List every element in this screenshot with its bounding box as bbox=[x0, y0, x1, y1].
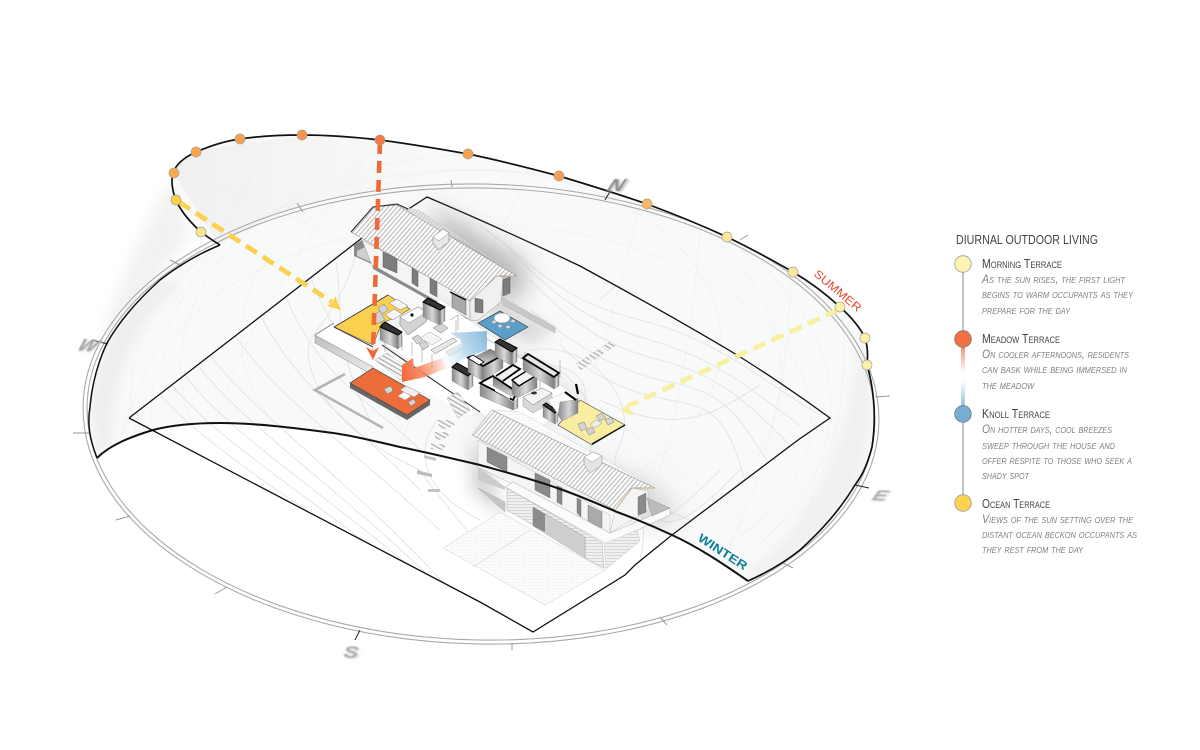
room H bbox=[543, 403, 558, 424]
north house chimney bbox=[433, 229, 449, 250]
legend item: ocean terrace: Ocean Terrace bbox=[982, 497, 1050, 511]
low wall bbox=[503, 298, 555, 333]
legend item: knoll terrace: sweep through the house and bbox=[982, 440, 1115, 452]
legend item: morning terrace: begins to warm occupants as they bbox=[982, 289, 1134, 301]
legend item: meadow terrace: Meadow Terrace bbox=[982, 332, 1060, 346]
stairs and stepping stones bbox=[375, 341, 616, 492]
room I bbox=[548, 384, 578, 421]
terrace plinth and middle level floor bbox=[315, 300, 585, 440]
compass letter E: E bbox=[867, 488, 893, 504]
interior kitchen island bbox=[400, 307, 427, 335]
room A bbox=[452, 363, 473, 390]
legend item: ocean terrace bbox=[982, 497, 1138, 556]
north house windows bbox=[383, 252, 510, 315]
compass ticks bbox=[73, 180, 890, 650]
carport bbox=[354, 240, 376, 266]
low L wall bbox=[315, 374, 383, 428]
south house lower wing bbox=[478, 467, 505, 490]
orange dashed sun ray bbox=[366, 142, 380, 360]
site plane contours bbox=[160, 225, 820, 590]
compass ring bbox=[78, 176, 884, 652]
legend item: ocean terrace: Views of the sun setting over the bbox=[982, 514, 1134, 526]
legend item: knoll terrace: On hotter days, cool breezes bbox=[982, 424, 1113, 436]
north house walls bbox=[362, 240, 470, 320]
compass letter W: W bbox=[72, 336, 104, 355]
compass letter S: S bbox=[342, 644, 362, 663]
legend bbox=[955, 232, 1138, 556]
site plane outline bbox=[129, 197, 830, 632]
north house bbox=[351, 204, 555, 345]
legend item: morning terrace: As the sun rises, the first light bbox=[981, 274, 1126, 286]
sun position markers bbox=[169, 130, 872, 370]
dining table bbox=[523, 388, 552, 413]
legend item: morning terrace: Morning Terrace bbox=[982, 257, 1062, 271]
room F bbox=[523, 354, 559, 389]
south house chimney bbox=[584, 452, 602, 473]
south house windows bbox=[487, 447, 646, 528]
room B bbox=[467, 349, 503, 381]
legend item: meadow terrace: On cooler afternoons, residents bbox=[982, 349, 1130, 361]
compass letter N: N bbox=[604, 175, 634, 196]
south house bbox=[443, 410, 680, 605]
knoll terrace bbox=[478, 311, 528, 340]
meadow terrace bbox=[350, 368, 430, 420]
legend timeline bbox=[955, 256, 971, 511]
north house rear roof bbox=[398, 206, 517, 276]
legend item: knoll terrace: offer respite to those who seek a bbox=[982, 455, 1132, 467]
driveway bbox=[443, 512, 605, 605]
wall block ocean bbox=[380, 322, 402, 349]
winter sun path bbox=[97, 423, 748, 581]
compass letter S: S bbox=[341, 643, 361, 662]
summer sun path bbox=[172, 135, 874, 581]
orange breeze arrow bbox=[402, 358, 447, 382]
legend item: meadow terrace: the meadow bbox=[982, 380, 1035, 392]
room E bbox=[496, 365, 537, 398]
wall block north bbox=[423, 298, 445, 325]
room C bbox=[495, 339, 517, 366]
legend title: DIURNAL OUTDOOR LIVING bbox=[956, 232, 1098, 247]
ocean terrace bbox=[334, 295, 410, 347]
compass letter E: E bbox=[868, 489, 894, 505]
south house walls bbox=[478, 440, 610, 533]
dome left edge bbox=[89, 245, 220, 458]
legend item: knoll terrace: Knoll Terrace bbox=[982, 407, 1050, 421]
legend item: ocean terrace: distant ocean beckon occupants as bbox=[982, 529, 1138, 541]
south house podium bbox=[505, 482, 670, 544]
winter label: WINTER bbox=[695, 531, 750, 573]
compass letter W: W bbox=[73, 337, 105, 356]
north house foundation bbox=[373, 265, 467, 321]
yellow dashed sun ray bbox=[179, 202, 341, 310]
dome shadow outside compass ring bbox=[100, 178, 190, 345]
pale yellow dashed sun ray bbox=[620, 310, 838, 416]
blue breeze arrow bbox=[436, 331, 487, 370]
sun path dome surface bbox=[90, 138, 874, 580]
interior wall blocks bbox=[380, 298, 578, 424]
legend item: ocean terrace: they rest from the day bbox=[982, 544, 1084, 556]
legend item: meadow terrace bbox=[982, 332, 1130, 392]
south house roof bbox=[472, 410, 655, 510]
legend item: knoll terrace bbox=[982, 407, 1132, 482]
legend item: morning terrace: prepare for the day bbox=[982, 305, 1071, 317]
legend item: meadow terrace: can bask while being immersed in bbox=[982, 364, 1127, 376]
north house roof bbox=[351, 205, 517, 301]
legend item: knoll terrace: shady spot bbox=[982, 470, 1030, 482]
interior furniture bbox=[372, 299, 560, 408]
morning terrace bbox=[558, 400, 625, 445]
south house rear roof bbox=[492, 410, 655, 488]
summer label: SUMMER bbox=[811, 268, 863, 315]
compass letter N: N bbox=[602, 174, 632, 195]
legend item: morning terrace bbox=[981, 257, 1134, 317]
room D bbox=[480, 376, 518, 410]
